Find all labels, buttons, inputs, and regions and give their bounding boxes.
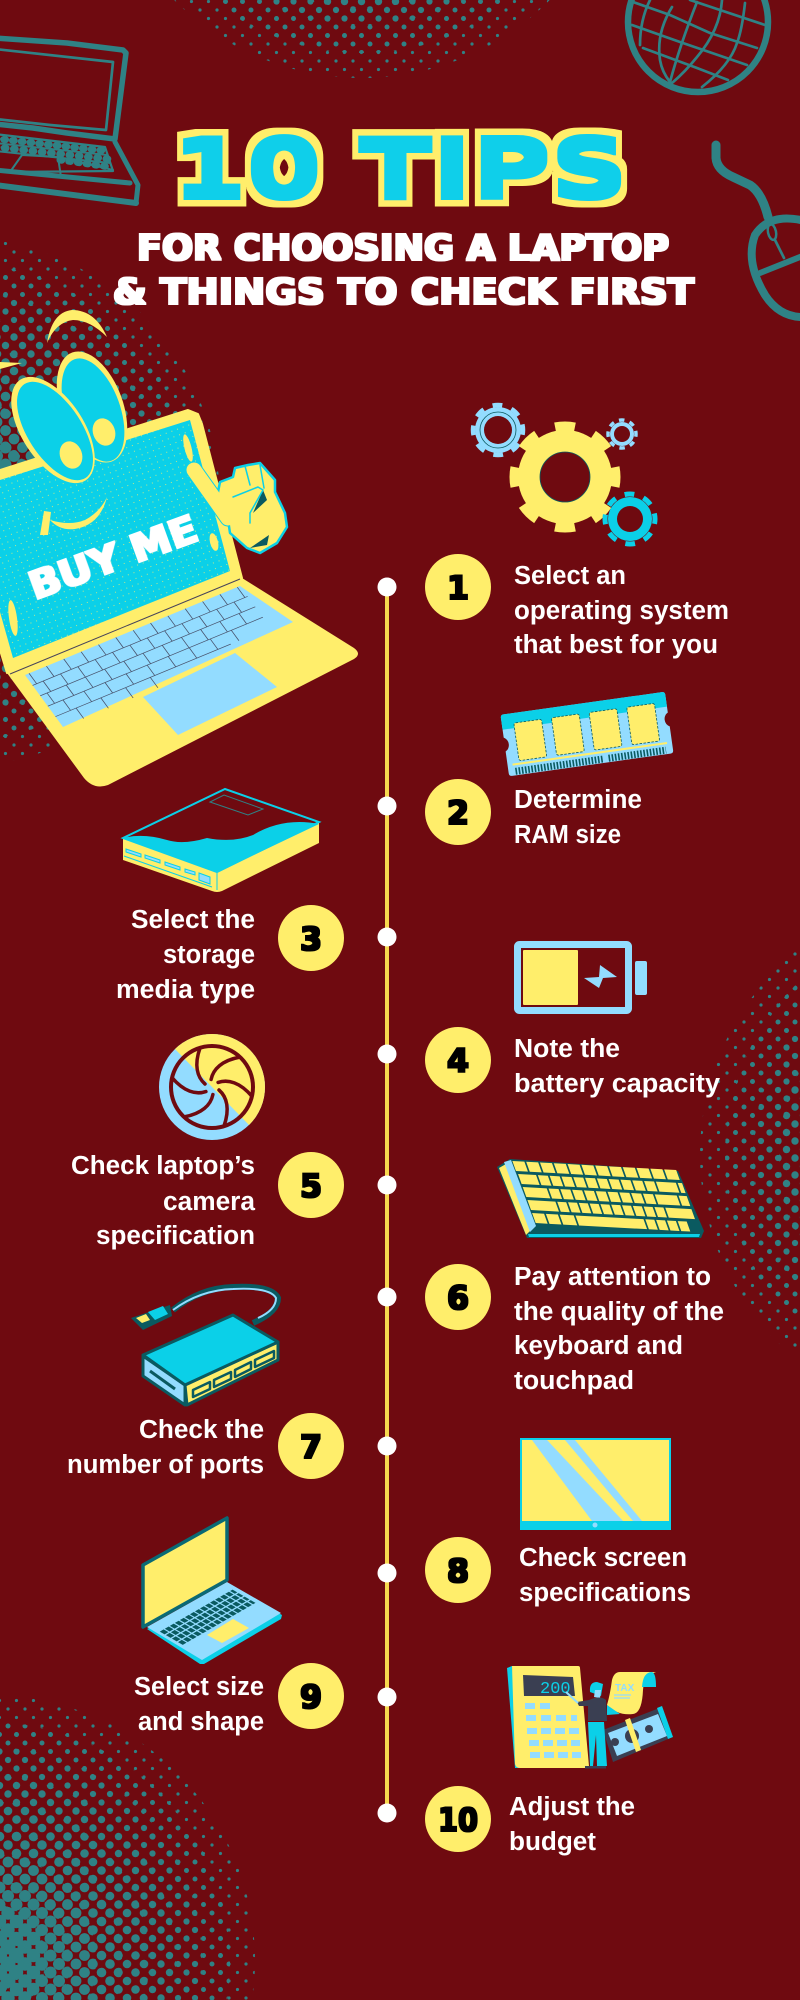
pointing hand bbox=[194, 463, 287, 553]
tip 8: specifications bbox=[519, 1579, 691, 1607]
cyan gear bbox=[605, 494, 655, 544]
tip 1: 1 bbox=[447, 569, 469, 607]
money bbox=[603, 1706, 673, 1762]
tip 5: specification bbox=[96, 1222, 255, 1250]
BUY ME text: BUY ME bbox=[23, 507, 203, 608]
subtitle bbox=[113, 228, 694, 313]
tip 2: Determine bbox=[514, 786, 642, 814]
icon: outline laptop, top left bbox=[0, 38, 138, 203]
tax receipt: TAX bbox=[615, 1683, 635, 1694]
tip 9: Select size bbox=[134, 1673, 264, 1701]
tip 6: Pay attention to bbox=[514, 1263, 711, 1291]
tip 4 bbox=[425, 1027, 721, 1098]
tip 6: touchpad bbox=[514, 1367, 634, 1395]
tip 3: Select the bbox=[131, 906, 255, 934]
tip 6: keyboard and bbox=[514, 1332, 683, 1360]
tip 8 bbox=[425, 1537, 691, 1607]
timeline bbox=[378, 578, 396, 1822]
tip 3: media type bbox=[116, 976, 255, 1004]
tip 4: Note the bbox=[514, 1035, 620, 1063]
smile bbox=[40, 497, 107, 535]
tip 9: 9 bbox=[300, 1678, 322, 1716]
tip 10: 10 bbox=[438, 1801, 478, 1839]
tip 9: and shape bbox=[138, 1708, 264, 1736]
calculator bbox=[507, 1666, 589, 1768]
tip 5 bbox=[71, 1152, 344, 1250]
tip 3 bbox=[116, 905, 344, 1004]
subtitle: & THINGS TO CHECK FIRST bbox=[113, 272, 694, 313]
icon: monitor screen bbox=[520, 1438, 671, 1530]
tip 7: number of ports bbox=[67, 1451, 264, 1479]
illustration: smiling yellow laptop with BUY ME bbox=[0, 310, 358, 786]
tip 7: Check the bbox=[139, 1416, 264, 1444]
tip 10: budget bbox=[509, 1828, 597, 1856]
tip 3: 3 bbox=[300, 920, 322, 958]
tip 5: Check laptop’s bbox=[71, 1152, 255, 1180]
icon: calculator, person and money bbox=[507, 1666, 673, 1768]
blue gear bbox=[473, 405, 523, 455]
icon: battery bbox=[518, 944, 647, 1010]
tip 7 bbox=[67, 1413, 344, 1479]
icon: keyboard bbox=[497, 1159, 704, 1238]
tip 2: RAM size bbox=[514, 821, 621, 849]
small blue gear bbox=[608, 420, 636, 448]
icon: gears bbox=[473, 405, 655, 544]
tip 4: 4 bbox=[447, 1042, 469, 1080]
tip 3: storage bbox=[163, 941, 255, 969]
tip 1: Select an bbox=[514, 562, 626, 590]
title: 10 TIPS bbox=[172, 123, 628, 216]
eyes bbox=[11, 352, 128, 484]
calculator: 200 bbox=[540, 1680, 571, 1699]
tip 2 bbox=[425, 779, 642, 849]
subtitle: FOR CHOOSING A LAPTOP bbox=[137, 228, 669, 269]
icon: RAM module bbox=[500, 692, 674, 776]
tip 9 bbox=[134, 1663, 344, 1736]
tip 2: 2 bbox=[447, 794, 469, 832]
tip 8: 8 bbox=[447, 1552, 469, 1590]
tip 4: battery capacity bbox=[514, 1070, 721, 1098]
tip 10: Adjust the bbox=[509, 1793, 635, 1821]
tip 1: that best for you bbox=[514, 631, 718, 659]
icon: outline computer mouse, right edge bbox=[716, 145, 800, 317]
tax receipt bbox=[607, 1672, 656, 1715]
tip 1 bbox=[425, 554, 729, 659]
tip 5: camera bbox=[163, 1188, 256, 1216]
tip 1: operating system bbox=[514, 597, 729, 625]
tip 6: the quality of the bbox=[514, 1298, 724, 1326]
tip 5: 5 bbox=[300, 1167, 322, 1205]
icon: external storage drive bbox=[123, 789, 319, 892]
icon: outline globe, top right bbox=[628, 0, 768, 92]
tip 6: 6 bbox=[447, 1279, 469, 1317]
tip 8: Check screen bbox=[519, 1544, 687, 1572]
tip 7: 7 bbox=[300, 1428, 322, 1466]
tip 6 bbox=[425, 1263, 724, 1395]
icon: isometric laptop bbox=[143, 1518, 282, 1664]
big yellow gear bbox=[514, 426, 616, 528]
person bbox=[566, 1682, 607, 1768]
tip 10 bbox=[425, 1786, 635, 1856]
icon: camera aperture bbox=[159, 1034, 265, 1140]
icon: USB hub bbox=[131, 1287, 278, 1405]
